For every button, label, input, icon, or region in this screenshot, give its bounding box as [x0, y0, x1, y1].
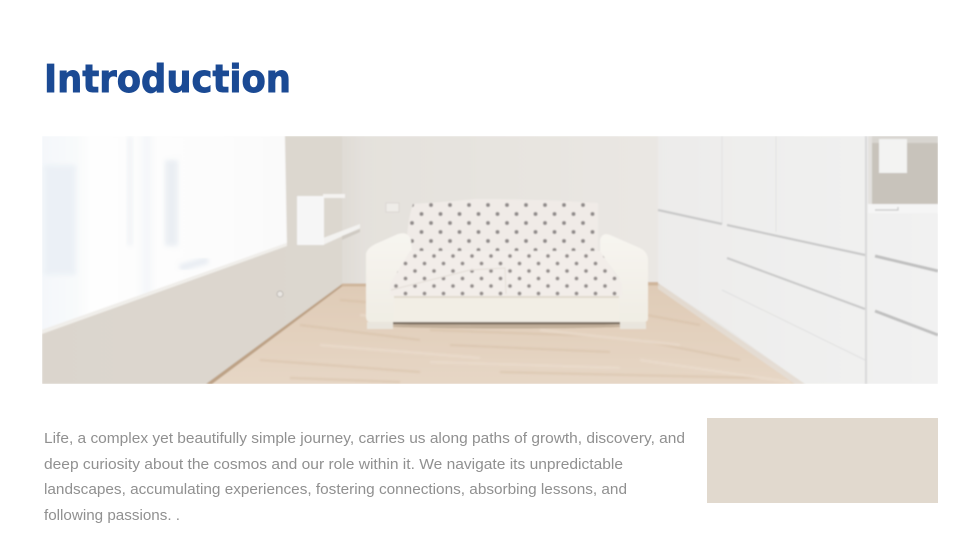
- curtain: [42, 136, 287, 334]
- right arm: [600, 234, 648, 322]
- beige accent block: [707, 418, 938, 503]
- photo: living room with white sofa: [42, 136, 938, 384]
- body text: deep curiosity about the cosmos and our role within it. We navigate its unpredictable: [44, 456, 623, 473]
- niche: [868, 136, 938, 213]
- seat base: [394, 296, 619, 322]
- baseboards: [206, 282, 660, 384]
- feet: [367, 322, 393, 329]
- wall socket: [387, 204, 398, 211]
- wall outlet: [277, 291, 283, 297]
- body text: Life, a complex yet beautifully simple journey, carries us along paths of growth, discovery, and: [44, 430, 685, 447]
- left arm: [366, 233, 412, 322]
- left wall: [42, 136, 342, 384]
- back wall: [340, 136, 662, 286]
- body text: following passions. .: [44, 507, 180, 524]
- body text: landscapes, accumulating experiences, fostering connections, absorbing lessons, and: [44, 481, 627, 498]
- body text: [44, 430, 685, 524]
- cabinets: [658, 136, 938, 384]
- title: Introduction: [44, 57, 291, 101]
- sofa: [366, 199, 648, 329]
- seat cushions: [390, 251, 622, 296]
- wooden floor: [207, 285, 808, 384]
- back cushion: [407, 199, 598, 252]
- wall shelf: [297, 194, 360, 245]
